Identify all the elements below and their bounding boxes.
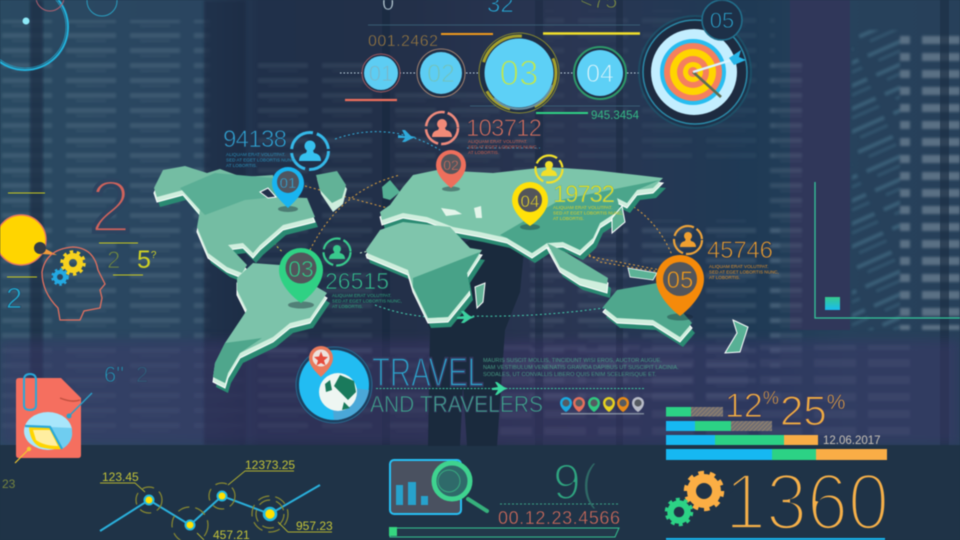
value 94138: 94138 bbox=[223, 126, 287, 153]
node 03: 03 bbox=[500, 54, 538, 93]
caption 04: AT LOBORTIS. bbox=[553, 216, 584, 221]
caption 03: ALIQUAM ERAT VOLUTPAT. bbox=[332, 293, 391, 298]
value 19732: 19732 bbox=[553, 181, 615, 208]
caption 02: ALIQUAM ERAT VOLUTPAT. bbox=[468, 139, 527, 144]
title: travel and travelers bbox=[296, 346, 679, 423]
user icon 02 bbox=[426, 112, 458, 144]
caption 01: ALIQUAM ERAT VOLUTPAT. bbox=[226, 152, 285, 157]
pie chart bbox=[24, 412, 72, 450]
node 01 bbox=[362, 54, 400, 92]
silhouette: standing person bbox=[405, 240, 525, 446]
right frame with marker bbox=[815, 182, 960, 318]
bar chart card bbox=[390, 460, 461, 514]
pin 02 with user stat bbox=[426, 112, 542, 192]
floating digits and rules bbox=[6, 165, 157, 315]
date code: 00.12.23.4566 bbox=[498, 508, 620, 528]
value 26515: 26515 bbox=[325, 268, 389, 294]
digit: 5: 5 bbox=[137, 246, 151, 274]
caption 04: ALIQUAM ERAT VOLUTPAT. bbox=[553, 205, 612, 210]
pin 05 with user stat bbox=[656, 226, 779, 320]
line chart bbox=[100, 458, 333, 540]
head outline bbox=[42, 247, 105, 320]
heading: TRAVEL: TRAVEL bbox=[372, 349, 484, 395]
chart labels: 957.23 bbox=[296, 519, 333, 533]
accent line: orange bbox=[441, 33, 493, 35]
bottom blue strip bbox=[666, 538, 885, 540]
node 04: 04 bbox=[586, 60, 614, 88]
pin 01: 01 bbox=[280, 175, 296, 192]
progress bar bbox=[389, 527, 619, 537]
percent 12: 12 bbox=[725, 387, 763, 425]
continent: Madagascar bbox=[475, 283, 485, 308]
continent: South America bbox=[213, 263, 327, 383]
pin 05: 05 bbox=[667, 267, 693, 294]
chart points bbox=[144, 492, 276, 530]
heading: AND TRAVELERS: AND TRAVELERS bbox=[370, 391, 543, 417]
digits 9(: 9( bbox=[553, 454, 598, 510]
gear: yellow bbox=[62, 252, 84, 274]
title body text: SODALES, UT CONVALLIS LIBERO QUIS ENIM SCELERISQUE ET. bbox=[483, 372, 657, 378]
accent line: green bbox=[536, 112, 588, 114]
top-left circles bbox=[0, 0, 117, 70]
percent 25: 25 bbox=[780, 387, 827, 434]
continent: Australia bbox=[603, 268, 692, 337]
row of mini pins bbox=[560, 397, 644, 414]
pin 01 with user stat bbox=[223, 126, 328, 212]
caption 05: ALIQUAM ERAT VOLUTPAT. bbox=[709, 264, 768, 269]
map: extrusion shadow bbox=[157, 176, 695, 393]
percent 25: % bbox=[827, 391, 845, 414]
node 03 bbox=[479, 33, 559, 113]
user icon 05 bbox=[674, 226, 702, 254]
caption 03: AT LOBORTIS. bbox=[332, 304, 363, 309]
caption 02: AT LOBORTIS. bbox=[468, 150, 499, 155]
thinker graphic: head with gears bbox=[0, 215, 105, 320]
readout 001.2462: 001.2462 bbox=[368, 33, 438, 50]
digit: blue 2: 2 bbox=[6, 283, 22, 315]
digits near document: 23 bbox=[2, 477, 16, 491]
digits near document: 6" bbox=[104, 362, 124, 387]
node 01: 01 bbox=[369, 61, 393, 86]
bar row 2 bbox=[666, 421, 772, 431]
chart labels: 12373.25 bbox=[245, 458, 295, 472]
target icon with arrow bbox=[639, 0, 751, 128]
percent 12: % bbox=[763, 388, 779, 408]
document with pie chart bbox=[15, 374, 92, 463]
continent: New Zealand bbox=[725, 320, 748, 353]
top timeline with numbered nodes bbox=[340, 0, 640, 122]
plane icon: green bbox=[457, 311, 475, 323]
digit: large 2: 2 bbox=[90, 165, 131, 248]
node 02: 02 bbox=[427, 60, 455, 88]
user icon 01 bbox=[292, 132, 328, 170]
caption 04: SED AT EGET LOBORTIS NUNC, bbox=[553, 210, 623, 216]
accent line: yellow bbox=[543, 32, 640, 35]
node 04 bbox=[574, 47, 626, 99]
world map bbox=[154, 166, 748, 393]
plane icon: blue bbox=[398, 130, 416, 142]
gear: blue bbox=[52, 270, 68, 284]
caption 03: SED AT EGET LOBORTIS NUNC, bbox=[332, 298, 402, 304]
title body text: MAURIS SUSCIT MOLLIS, TINCIDUNT WISI EROS, AUCTOR AUGUE. bbox=[483, 358, 662, 364]
pin 04 with user stat bbox=[512, 156, 623, 230]
readout 945.3454: 945.3454 bbox=[591, 110, 640, 122]
chart labels bbox=[102, 458, 333, 540]
caption 01: AT LOBORTIS. bbox=[226, 163, 257, 168]
title body text: NAM VESTIBULUM VENENATIS GRAVIDA DAPIBUS UT SUSCIPIT LACINIA. bbox=[483, 365, 679, 371]
bar row 1 bbox=[666, 407, 723, 416]
continent: Eurasia bbox=[380, 167, 663, 284]
caption 05: SED AT EGET LOBORTIS NUNC, bbox=[709, 270, 779, 274]
top numbers bbox=[382, 0, 617, 18]
chart rings bbox=[136, 483, 288, 540]
continent: Africa bbox=[366, 222, 482, 318]
gears icon bbox=[666, 473, 722, 524]
pin 04: 04 bbox=[521, 192, 539, 211]
map: white coast edge bbox=[154, 171, 692, 388]
node 02 bbox=[417, 49, 465, 97]
continent: Greenland bbox=[316, 171, 347, 212]
digits near document: 2 bbox=[136, 362, 148, 387]
yellow sun bubble bbox=[0, 215, 57, 265]
magnifier bbox=[434, 463, 487, 511]
caption 01: SED AT EGET LOBORTIS NUNC, bbox=[226, 158, 296, 162]
stats panel: progress bars bbox=[666, 387, 887, 460]
caption 05: AT LOBORTIS. bbox=[709, 275, 740, 280]
user icon 03 bbox=[324, 238, 350, 266]
pin 03: 03 bbox=[288, 256, 314, 282]
title emblem with pin and globe bbox=[296, 346, 372, 423]
caption 02: SED AT EGET LOBORTIS NUNC, bbox=[468, 144, 538, 150]
pin 03 with user stat bbox=[279, 238, 402, 309]
digits near document bbox=[2, 362, 148, 491]
search panel bbox=[389, 454, 620, 537]
continent: North America bbox=[154, 166, 315, 273]
value 45746: 45746 bbox=[707, 237, 773, 264]
continent: Iceland and UK bbox=[382, 180, 400, 200]
paperclip bbox=[24, 374, 36, 410]
user icon 04 bbox=[536, 156, 562, 182]
badge 05: 05 bbox=[710, 8, 734, 33]
route lines on the map bbox=[270, 132, 672, 318]
value 103712: 103712 bbox=[466, 115, 542, 142]
chart labels: 123.45 bbox=[102, 470, 139, 484]
accent line: salmon bbox=[345, 99, 397, 101]
plane icon on title bbox=[492, 382, 508, 395]
bar row 4 bbox=[666, 449, 887, 460]
digit: small 2: 2 bbox=[107, 247, 120, 274]
bar row 3 bbox=[666, 435, 818, 445]
date label: 12.06.2017 bbox=[823, 435, 881, 447]
pin 02: 02 bbox=[443, 157, 459, 173]
digit: 5: ? bbox=[151, 250, 157, 261]
